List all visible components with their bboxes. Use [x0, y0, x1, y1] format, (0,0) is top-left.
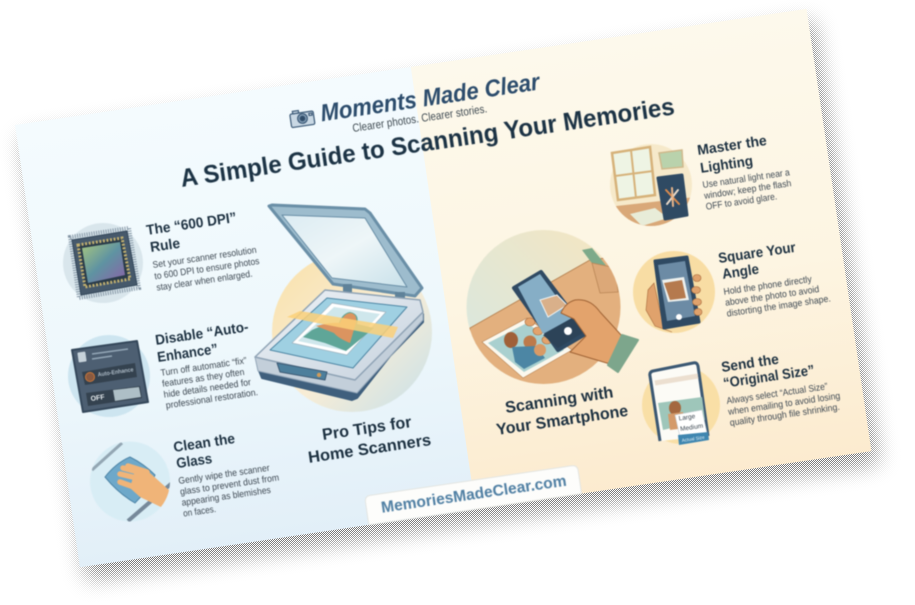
icon: settings panel: OFF: [90, 394, 106, 403]
tagline: Clearer photos. Clearer stories.: [352, 103, 488, 135]
text: send the original size: Send the: [720, 352, 780, 376]
tip: clean the glass: [90, 426, 283, 522]
text: master the lighting: Lighting: [699, 153, 754, 177]
panel: home scanner tips: [63, 205, 432, 522]
illustration: flatbed scanner: [255, 205, 432, 412]
logo: [289, 68, 543, 135]
text: send the original size: “Original Size”: [722, 363, 816, 392]
phone: [514, 272, 587, 350]
caption: scanning with your smartphone: Scanning with: [504, 383, 614, 417]
caption: scanning with your smartphone: [492, 382, 629, 439]
text: 600 DPI rule: [145, 207, 262, 293]
text: clean the glass: appearing as blemishes: [181, 484, 272, 508]
text: master the lighting: [696, 130, 794, 212]
icon: phone held square: [633, 251, 715, 333]
text: square your angle: above the photo to avoid: [724, 283, 820, 308]
printed family photo: [482, 318, 572, 378]
icon: camera: [289, 108, 315, 128]
scanner lid: [269, 205, 422, 300]
text: clean the glass: on faces.: [182, 503, 217, 519]
illustration: phone scanning a photo: [466, 230, 640, 384]
text: disable auto-enhance: hide details needed for: [163, 376, 252, 400]
text: 600 DPI rule: stay clear when enlarged.: [156, 268, 253, 293]
icon: image sensor chip: [63, 223, 143, 303]
caption: scanning with your smartphone: Your Smartphone: [495, 402, 629, 439]
caption: pro tips for home scanners: Home Scanners: [307, 431, 432, 467]
icon: phone email size menu: Actual Size: [681, 435, 705, 443]
text: clean the glass: Gently wipe the scanner: [178, 462, 270, 486]
icon: phone email size menu: Medium: [680, 423, 704, 433]
text: clean the glass: glass to prevent dust from: [179, 471, 280, 497]
text: master the lighting: Use natural light near a: [702, 166, 791, 190]
tip: 600 DPI rule: [63, 207, 262, 303]
text: disable auto-enhance: [154, 319, 259, 411]
text: send the original size: when emailing to avoid losing: [726, 390, 841, 417]
text: disable auto-enhance: features as they often: [161, 366, 245, 389]
text: clean the glass: Clean the: [172, 431, 236, 456]
text: disable auto-enhance: professional restoration.: [165, 386, 259, 411]
caption: pro tips for home scanners: [304, 411, 432, 467]
icon: settings panel: [68, 335, 150, 417]
text: 600 DPI rule: The “600 DPI”: [145, 210, 238, 239]
text: square your angle: distorting the image shape.: [726, 292, 831, 319]
text: send the original size: quality through file shrinking.: [729, 401, 840, 428]
tip: disable auto-enhance: [68, 319, 259, 417]
icon: window and phone without flash: [608, 144, 695, 230]
shirt cuff: [608, 335, 638, 372]
icon: phone email size menu: [642, 363, 720, 445]
tip: send the original size: [642, 344, 842, 445]
text: master the lighting: OFF to avoid glare.: [705, 190, 778, 212]
text: square your angle: Hold the phone directly: [723, 273, 813, 297]
text: clean the glass: [172, 426, 283, 519]
hand: [561, 300, 622, 364]
text: disable auto-enhance: Disable “Auto-: [154, 319, 250, 349]
text: master the lighting: window; keep the flash: [702, 177, 792, 201]
text: disable auto-enhance: Enhance”: [156, 341, 219, 366]
title: A Simple Guide to Scanning Your Memories: [179, 93, 676, 193]
icon: settings panel: Auto-Enhance: [97, 367, 134, 378]
panel: smartphone tips: [460, 130, 842, 445]
text: master the lighting: Master the: [696, 133, 768, 159]
text: disable auto-enhance: Turn off automatic “fix”: [160, 354, 247, 378]
text: send the original size: Always select “Actual Size”: [726, 380, 828, 406]
icon: hand wiping glass: [90, 442, 172, 522]
website url pill: [365, 465, 582, 525]
caption: pro tips for home scanners: Pro Tips for: [321, 413, 413, 444]
website url pill: MemoriesMadeClear.com: [380, 473, 568, 517]
text: 600 DPI rule: to 600 DPI to ensure photos: [154, 255, 260, 281]
scanner base: [255, 290, 423, 400]
icon: phone email size menu: Large: [678, 413, 696, 422]
text: square your angle: [717, 236, 831, 319]
text: 600 DPI rule: Set your scanner resolution: [152, 244, 257, 270]
text: clean the glass: Glass: [175, 451, 213, 472]
text: send the original size: [720, 344, 842, 428]
text: 600 DPI rule: Rule: [149, 236, 181, 256]
text: square your angle: Angle: [721, 262, 760, 283]
tip: square your angle: [633, 236, 831, 333]
logo wordmark: Moments Made Clear: [319, 68, 543, 127]
tip: master the lighting: [610, 136, 792, 227]
text: square your angle: Square Your: [717, 240, 797, 267]
